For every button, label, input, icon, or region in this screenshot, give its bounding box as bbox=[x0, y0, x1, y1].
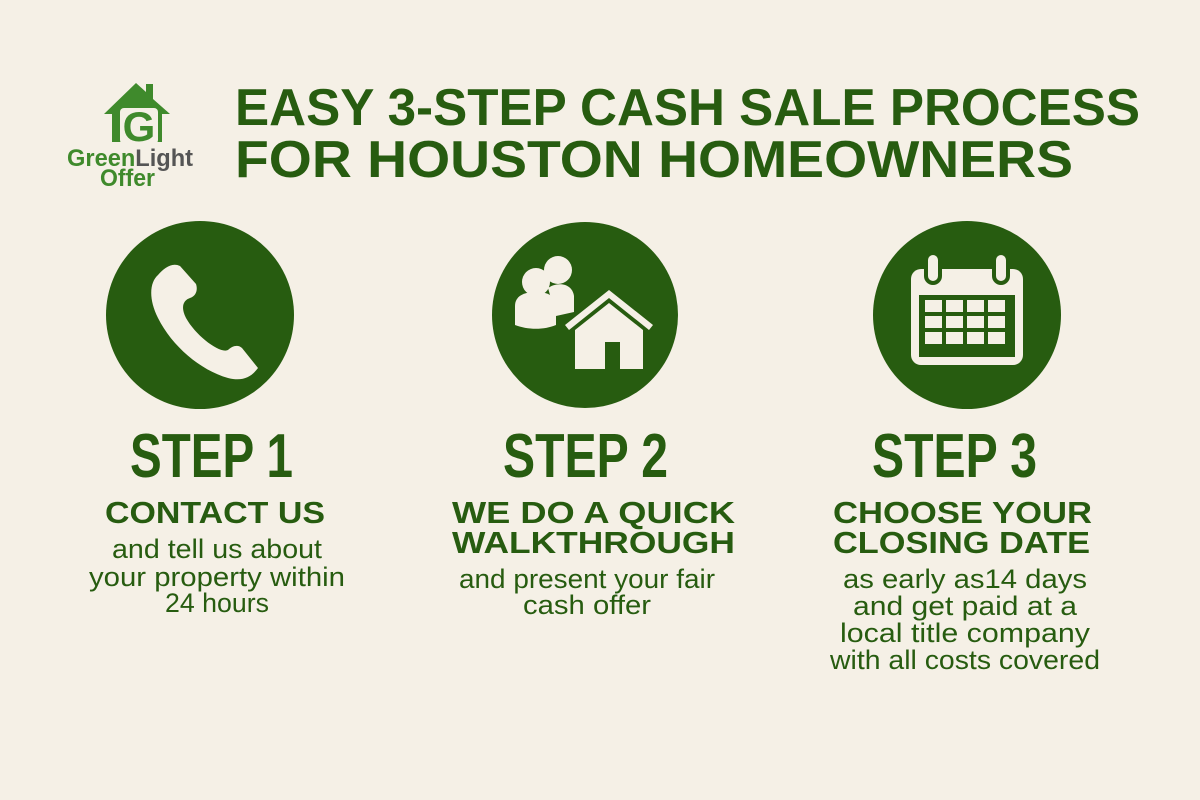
panel: step 3 bbox=[829, 221, 1100, 675]
step 1 body: and tell us about bbox=[112, 534, 323, 564]
step 1 body bbox=[89, 534, 345, 618]
step 3 subheading: CHOOSE YOUR bbox=[833, 495, 1092, 530]
icon: phone bbox=[106, 221, 294, 409]
title: EASY 3-STEP CASH SALE PROCESS bbox=[235, 79, 1140, 137]
step 2 body: cash offer bbox=[523, 590, 651, 620]
step 2 subheading: WALKTHROUGH bbox=[452, 525, 735, 560]
title: FOR HOUSTON HOMEOWNERS bbox=[235, 131, 1073, 189]
step 3 body bbox=[829, 564, 1100, 675]
step 3 body: with all costs covered bbox=[829, 645, 1100, 675]
step 2 body: and present your fair bbox=[459, 564, 715, 594]
step 3 subheading: CLOSING DATE bbox=[833, 525, 1090, 560]
step 1 body: 24 hours bbox=[165, 588, 269, 618]
logo: Offer bbox=[100, 165, 155, 192]
logo bbox=[67, 83, 193, 192]
title bbox=[235, 79, 1140, 189]
step 1 body: your property within bbox=[89, 562, 345, 592]
step 3 body: local title company bbox=[840, 618, 1091, 648]
step 1 subheading: CONTACT US bbox=[105, 495, 325, 530]
logo text: GreenLight bbox=[67, 145, 193, 172]
icon: logo house: G bbox=[123, 103, 155, 150]
step 3 body: and get paid at a bbox=[853, 591, 1078, 621]
panel: step 1 bbox=[89, 221, 345, 618]
step 2 heading: STEP 2 bbox=[503, 422, 668, 491]
icon: calendar bbox=[873, 221, 1061, 409]
step 2 body bbox=[459, 564, 715, 620]
panel: step 2 bbox=[452, 222, 736, 620]
icon: people and house bbox=[492, 222, 678, 408]
step 3 subheading bbox=[833, 495, 1092, 560]
step 2 subheading bbox=[452, 495, 736, 560]
step 2 subheading: WE DO A QUICK bbox=[452, 495, 736, 530]
step 3 body: as early as14 days bbox=[843, 564, 1087, 594]
step 3 heading: STEP 3 bbox=[872, 422, 1037, 491]
step 1 heading: STEP 1 bbox=[130, 422, 293, 491]
